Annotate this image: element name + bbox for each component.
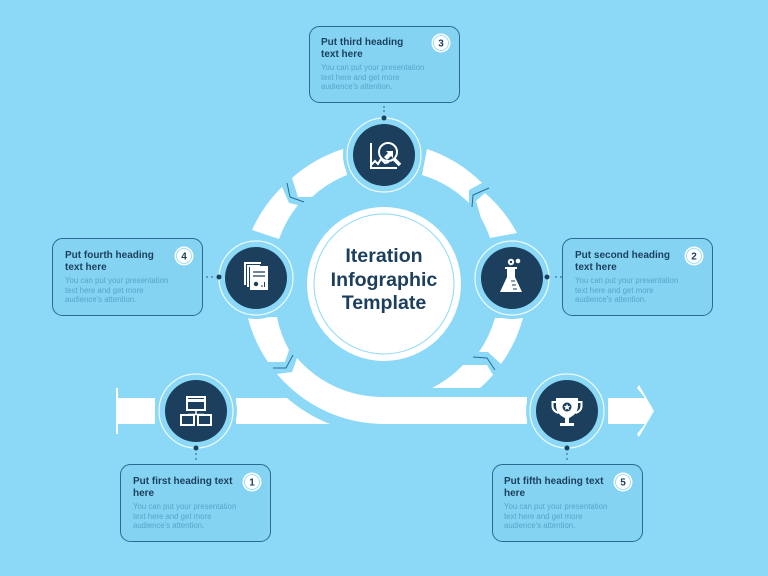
card 2: second heading	[562, 238, 712, 316]
badge 4: 4	[181, 252, 187, 262]
heading: Put second heading	[575, 250, 670, 261]
heading: text here	[575, 262, 617, 273]
cycle segment: top right	[422, 149, 482, 203]
title: Infographic	[331, 269, 437, 291]
exit arrow head	[608, 385, 654, 437]
cycle segment: left upper	[252, 187, 298, 239]
node 2: flask icon	[471, 237, 562, 319]
cycle arrow ring with entry and exit arrow	[116, 149, 654, 437]
chevrons between segments	[273, 183, 495, 370]
badge 1: 1	[249, 478, 255, 488]
body text: audience's attention.	[575, 295, 646, 304]
cycle segment: right lower	[479, 318, 523, 364]
title: Template	[342, 292, 426, 314]
body text: text here and get more	[65, 286, 143, 295]
icon: chart with magnifier	[371, 143, 400, 168]
card 3: third heading	[310, 26, 460, 102]
body text: You can put your presentation	[504, 502, 607, 511]
badge 1	[242, 472, 262, 492]
body text: You can put your presentation	[321, 63, 424, 72]
icon: trophy	[552, 398, 582, 426]
icon: flask	[500, 260, 522, 292]
body text: You can put your presentation	[65, 276, 168, 285]
body text: text here and get more	[321, 73, 399, 82]
badge 2	[684, 246, 704, 266]
body text: text here and get more	[575, 286, 653, 295]
title: Iteration	[345, 245, 423, 267]
arrow tail bar	[116, 388, 155, 434]
cycle segment: right upper	[476, 193, 517, 238]
body text: text here and get more	[133, 512, 211, 521]
connector	[382, 106, 386, 120]
body text: You can put your presentation	[133, 502, 236, 511]
badge 3: 3	[438, 38, 444, 50]
heading: Put first heading text	[133, 476, 233, 487]
body text: audience's attention.	[133, 521, 204, 530]
connector	[544, 274, 562, 280]
cycle segment: top left	[292, 149, 347, 197]
centre circle with title	[307, 207, 461, 361]
badge 4	[174, 246, 194, 266]
icon: documents	[245, 263, 268, 290]
badge 3	[432, 34, 450, 52]
body text: You can put your presentation	[575, 276, 678, 285]
heading: Put fourth heading	[65, 250, 154, 261]
body text: audience's attention.	[321, 82, 392, 91]
bar entering the cycle	[236, 398, 330, 424]
badge 5	[614, 472, 632, 492]
card 5: fifth heading	[492, 464, 642, 542]
heading: here	[504, 488, 526, 499]
node 5: trophy icon	[526, 370, 608, 460]
heading: text here	[321, 49, 363, 60]
cycle segment: lower left	[248, 317, 289, 362]
card 1: first heading	[120, 464, 270, 542]
icon: network blocks	[181, 397, 211, 425]
node 4: documents icon	[206, 237, 297, 319]
body text: audience's attention.	[65, 295, 136, 304]
body text: audience's attention.	[504, 521, 575, 530]
connector	[206, 274, 222, 280]
heading: text here	[65, 262, 107, 273]
heading: Put fifth heading text	[504, 476, 604, 487]
heading: Put third heading	[321, 37, 403, 48]
connector	[194, 446, 198, 460]
spiral segment running into the exit	[277, 358, 527, 424]
badge 2: 2	[691, 252, 697, 262]
body text: text here and get more	[504, 512, 582, 521]
node 1: hierarchy icon	[155, 370, 237, 460]
card 4: fourth heading	[52, 238, 202, 316]
node 3: magnifier chart icon	[343, 106, 425, 196]
connector	[564, 446, 570, 460]
cycle segment: bottom right	[432, 365, 493, 388]
badge 5: 5	[620, 478, 626, 488]
heading: here	[133, 488, 155, 499]
